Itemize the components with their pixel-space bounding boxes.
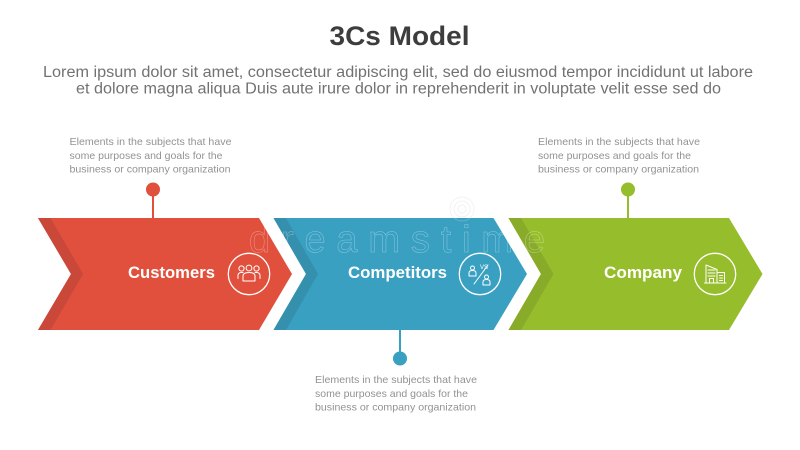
pin: customers (146, 182, 160, 218)
watermark (249, 197, 545, 261)
callout text: competitors: business or company organization (315, 402, 476, 414)
watermark: dreamstime (249, 219, 545, 261)
label: company: Company (604, 264, 683, 282)
callout text: company: some purposes and goals for the (538, 150, 691, 162)
callout text: company: business or company organization (538, 164, 699, 176)
subtitle text block: et dolore magna aliqua Duis aute irure dolor in reprehenderit in voluptate velit esse sed do (76, 80, 721, 98)
icon: customers group (228, 253, 270, 295)
icon: versus: VS (480, 265, 488, 271)
arrow: competitors (274, 218, 527, 330)
callout text: customers (70, 136, 232, 176)
callout text: company: Elements in the subjects that have (538, 136, 700, 148)
callout text: customers: business or company organization (70, 164, 231, 176)
icon: buildings (694, 253, 736, 295)
callout text: competitors (315, 374, 477, 414)
callout text: competitors: some purposes and goals for the (315, 388, 468, 400)
panel: competitors (274, 218, 527, 330)
pin: competitors (393, 330, 407, 366)
arrow: company (508, 218, 762, 330)
callout text: competitors: Elements in the subjects that have (315, 374, 477, 386)
pin: company (621, 182, 635, 218)
arrow: customers (38, 218, 292, 330)
label: customers: Customers (128, 264, 215, 282)
subtitle text block: Lorem ipsum dolor sit amet, consectetur adipiscing elit, sed do eiusmod tempor incididunt ut labore (43, 64, 753, 81)
callout text: company (538, 136, 700, 176)
panel: customers (38, 218, 292, 330)
panel: company (508, 218, 762, 330)
callout text: customers: some purposes and goals for the (70, 150, 223, 162)
callout text: customers: Elements in the subjects that have (70, 136, 232, 148)
title: 3Cs Model (330, 21, 470, 51)
icon: versus (459, 253, 501, 295)
label: competitors: Competitors (348, 264, 447, 282)
subtitle text block (43, 64, 753, 98)
